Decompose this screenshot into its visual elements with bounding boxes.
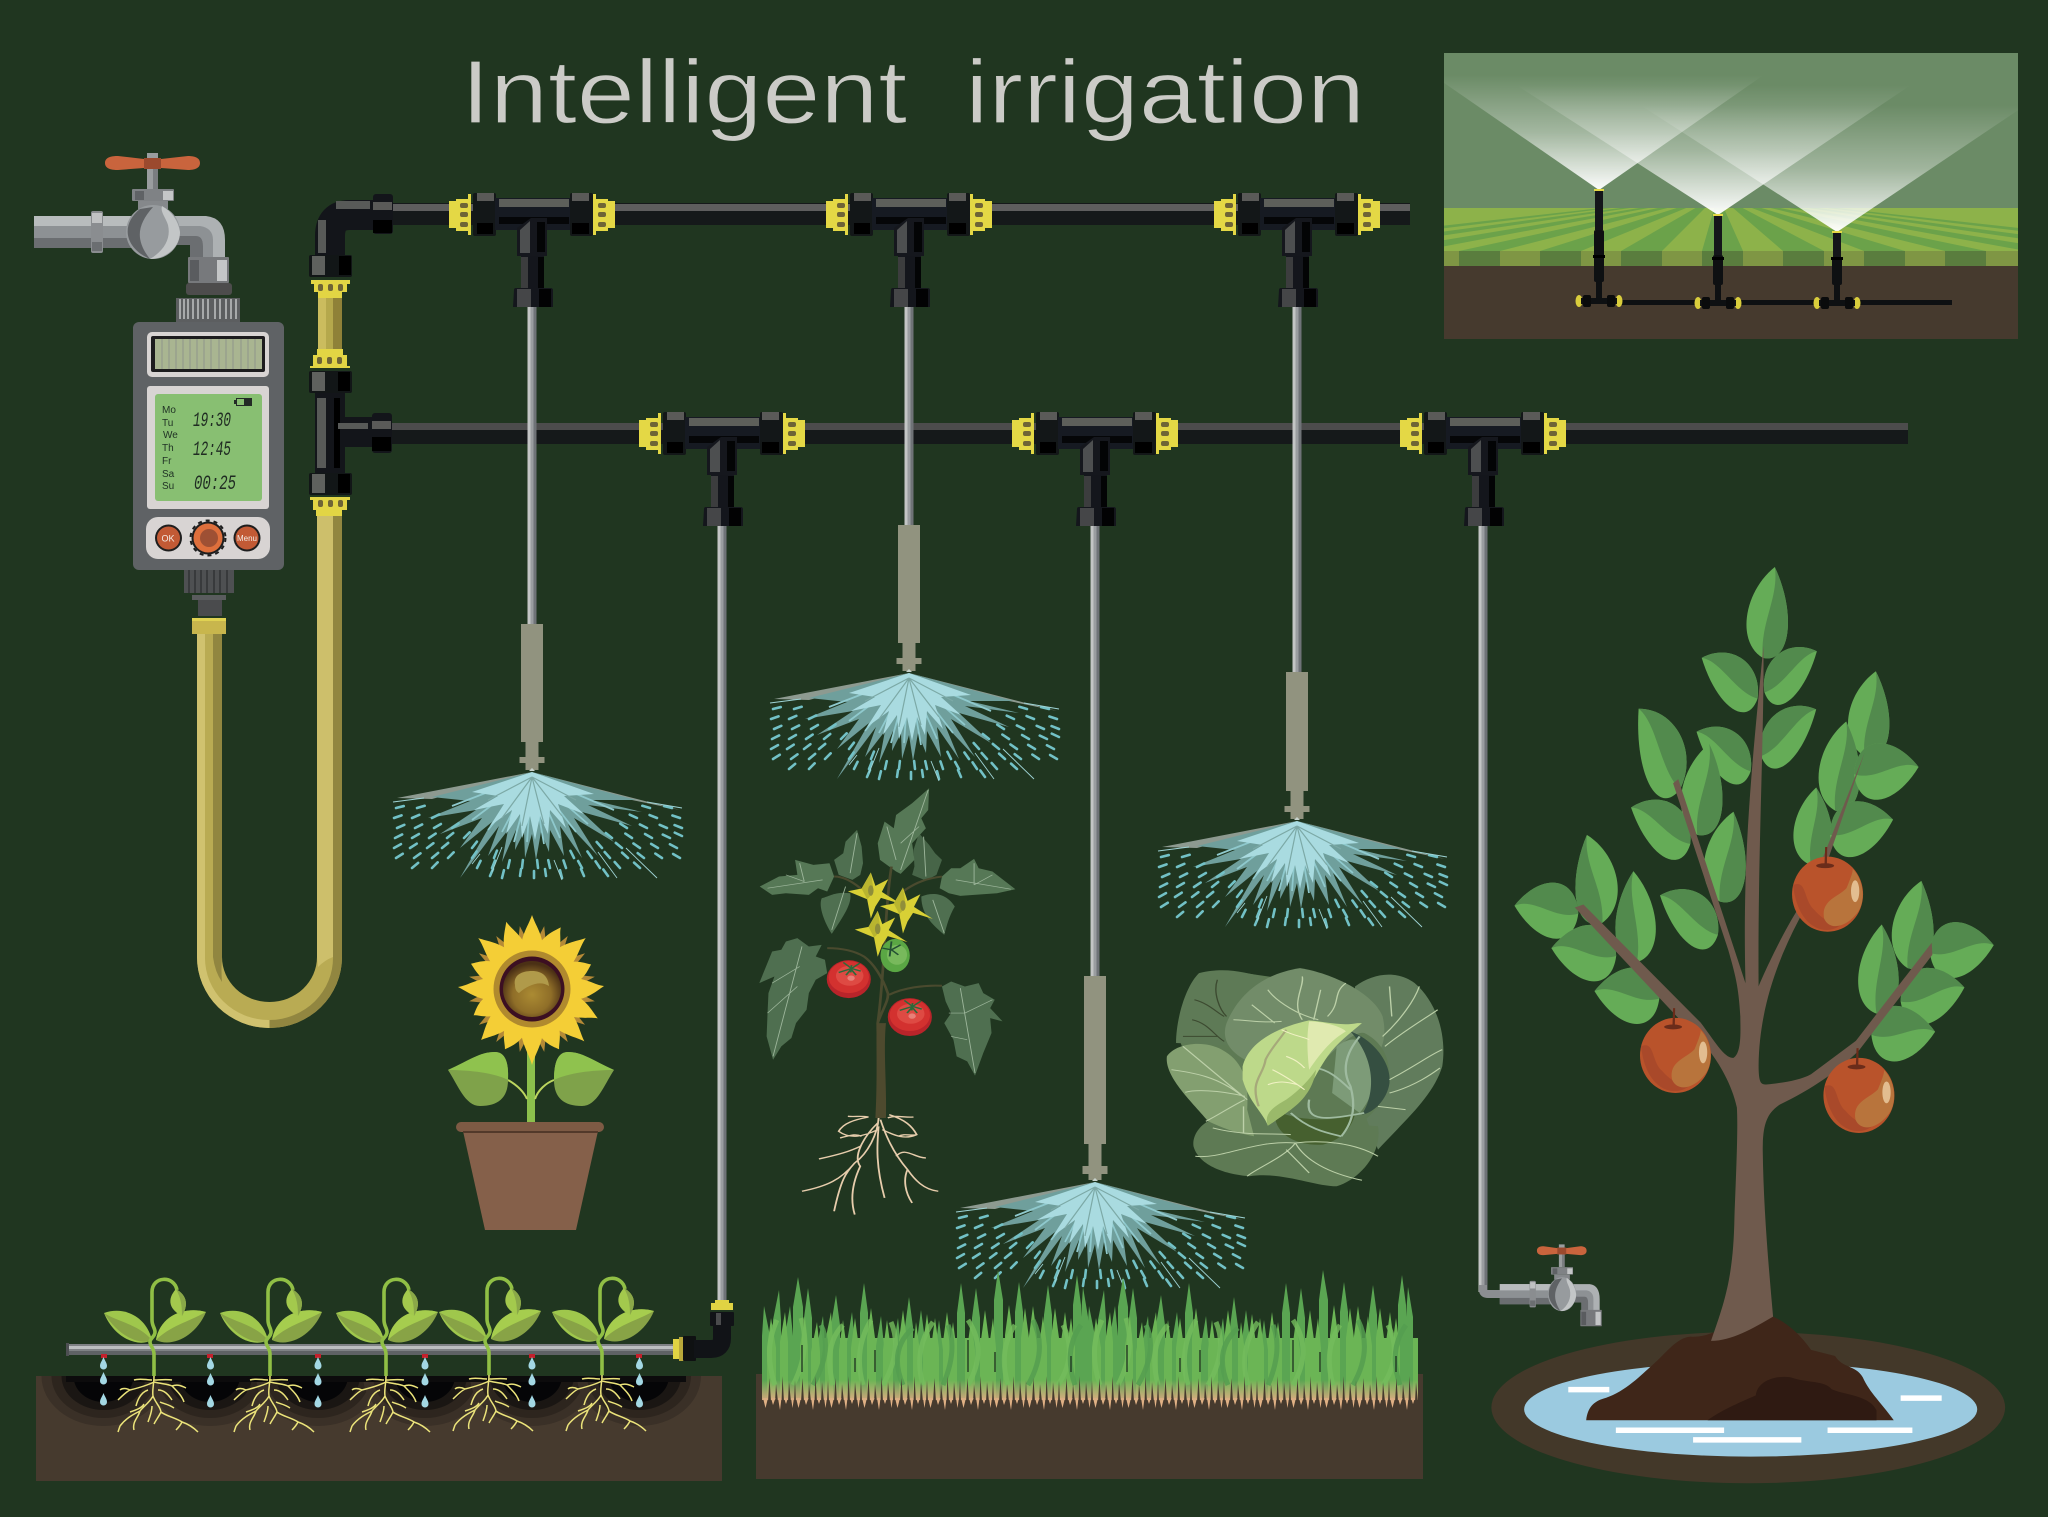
main faucet [34, 153, 229, 283]
sprinkler 3 [1814, 231, 1860, 309]
rods [528, 307, 1504, 1307]
left leaf [448, 1052, 508, 1106]
Menu button: Menu [237, 534, 257, 543]
nozzle 3 and spray [1158, 672, 1447, 929]
petals back [467, 924, 597, 1054]
elbow [318, 194, 393, 258]
lower connector [184, 570, 234, 634]
tomato leaves [759, 788, 1015, 1076]
weekdays: Th [162, 443, 174, 454]
seedlings [104, 1278, 654, 1432]
controls [146, 517, 270, 559]
pipe manifold [309, 194, 393, 516]
soil [36, 1376, 722, 1481]
outer leaves [1167, 968, 1443, 1186]
solar panel [147, 332, 269, 377]
flowers [848, 873, 933, 957]
weekdays: Su [162, 481, 174, 492]
nozzle 2 and spray [770, 525, 1059, 781]
tomato roots [802, 1115, 938, 1215]
pipe tees upper row [449, 193, 1380, 307]
small faucet [1500, 1244, 1602, 1326]
grass root fringe [763, 1372, 1418, 1412]
field band [1444, 251, 2018, 266]
apple tree with pond [1491, 559, 2005, 1483]
cabbage [1167, 968, 1443, 1186]
buried pipe [1620, 300, 1952, 305]
water glints [1568, 1387, 1942, 1443]
weekdays: Tu [162, 418, 173, 429]
flower centre [494, 950, 570, 1028]
middle collar and nut [309, 349, 352, 393]
nozzle 4 and spray [956, 976, 1245, 1290]
weekdays: Fr [162, 456, 172, 467]
trunk and branches [1575, 646, 1932, 1341]
body [133, 322, 284, 570]
timer hose [197, 298, 342, 1028]
soil [1444, 266, 2018, 339]
times: 19:30 [193, 410, 231, 433]
weekdays: We [163, 430, 178, 441]
water cones [1446, 84, 2010, 231]
pot [456, 1122, 604, 1230]
grass mass [763, 1338, 1418, 1400]
tomato stems [827, 867, 942, 1116]
drip elbow [673, 1300, 734, 1361]
petals front [458, 915, 604, 1065]
weekdays: Mo [162, 405, 176, 416]
irrigation timer [133, 283, 284, 634]
LCD screen [147, 386, 269, 509]
nozzle 1 and spray [393, 624, 682, 880]
leaves [1513, 559, 1995, 1063]
fruits [827, 939, 932, 1036]
dial [190, 520, 226, 556]
OK button: OK [161, 534, 175, 544]
lawn bed [756, 1270, 1423, 1479]
times: 00:25 [194, 473, 236, 496]
soil [756, 1374, 1423, 1479]
sprinkler 1 [1576, 189, 1622, 307]
apples [1640, 847, 1894, 1133]
wet soil shadows [42, 1376, 701, 1426]
left hose leg [197, 634, 222, 958]
battery icon [234, 398, 252, 406]
vertical gold pipe section [318, 298, 342, 352]
soil mound [1586, 1317, 1894, 1420]
grass blades left tile [762, 1270, 1088, 1400]
lower nut and collar [309, 473, 352, 516]
cabbage heart [1243, 1020, 1362, 1126]
times: 12:45 [193, 439, 231, 462]
pipe tees lower row [639, 412, 1566, 526]
crop field [1444, 208, 2018, 251]
right leaf [554, 1052, 614, 1106]
upper connector [176, 283, 240, 322]
water [1524, 1362, 1977, 1457]
weekdays: Sa [162, 469, 175, 480]
leaf veins [768, 790, 1011, 1073]
top main pipe [385, 203, 1410, 225]
weekdays [162, 405, 178, 492]
tomato plant [759, 788, 1015, 1215]
manifold tee [315, 393, 392, 473]
drip irrigation bed [36, 1278, 734, 1481]
emitters and drops [100, 1354, 643, 1408]
right hose leg [317, 510, 342, 958]
hose bend [197, 957, 342, 1028]
leaf veins [1171, 976, 1442, 1180]
grass blades right tile [1087, 1270, 1413, 1400]
title: Intelligent irrigation [461, 43, 1365, 143]
sky [1444, 53, 2018, 208]
panel: field sprinkler scene [1444, 53, 2018, 339]
sprinkler 2 [1694, 214, 1742, 309]
leaf stalks [508, 1080, 554, 1099]
drip pipe [66, 1343, 674, 1356]
sunflower in pot [448, 915, 614, 1230]
times [193, 410, 236, 496]
pond rim [1491, 1332, 2005, 1483]
lower main pipe [375, 423, 1908, 444]
nut and yellow collar [309, 255, 352, 298]
stem [527, 1040, 535, 1124]
